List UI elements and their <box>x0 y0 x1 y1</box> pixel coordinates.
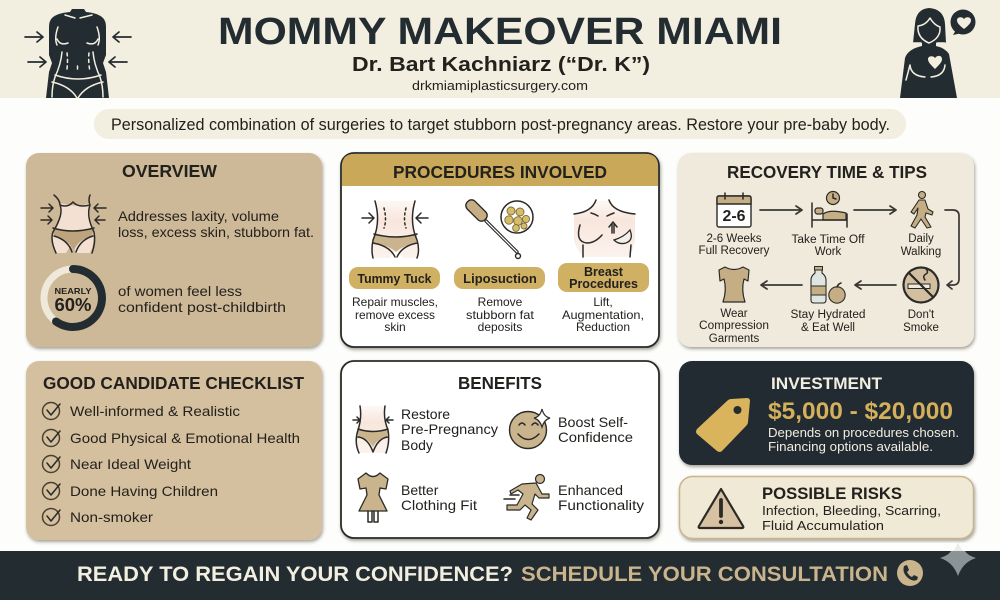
heading: benefits: BENEFITS <box>458 373 542 393</box>
procedure: tummy tuck <box>349 267 440 334</box>
header band <box>0 0 1000 98</box>
icon: waist <box>41 195 106 253</box>
risks text: Infection, Bleeding, Scarring, <box>762 503 941 518</box>
heading: risks: POSSIBLE RISKS <box>762 484 902 503</box>
procedure: tummy tuck: Tummy Tuck <box>358 271 432 286</box>
benefit: restore body: Body <box>401 437 433 453</box>
panel: overview: loss, excess skin, stubborn fat. <box>118 224 314 240</box>
check item 4: Done Having Children <box>70 483 218 499</box>
subtitle: doctor name: Dr. Bart Kachniarz (“Dr. K”) <box>352 54 650 76</box>
footer banner <box>0 541 1000 600</box>
step: time off: Take Time Off <box>792 234 865 246</box>
risks text: Fluid Accumulation <box>762 518 884 533</box>
step: hydrate and eat: Stay Hydrated <box>790 309 866 321</box>
benefit: clothing fit: Better <box>401 482 439 498</box>
step: time off <box>792 192 865 258</box>
check item 2: Good Physical & Emotional Health <box>70 430 300 446</box>
check item 1: Well-informed & Realistic <box>70 403 240 419</box>
panel: overview: confident post-childbirth <box>118 299 286 315</box>
check item 5 <box>42 508 153 526</box>
procedure: tummy tuck: remove excess <box>355 308 435 322</box>
arrow <box>760 206 802 214</box>
benefit: self-confidence: Boost Self- <box>558 414 628 430</box>
benefit: self-confidence <box>510 409 633 448</box>
icon: phone <box>897 560 923 586</box>
icon: body silhouette with arrows <box>25 9 131 98</box>
panel: recovery time and tips <box>678 153 974 347</box>
step: no smoking: Don't <box>908 309 935 321</box>
heading: recovery: RECOVERY TIME & TIPS <box>727 162 927 182</box>
step: compression garments: Garments <box>709 333 759 345</box>
procedure: breast procedures: Procedures <box>569 277 638 291</box>
website: drkmiamiplasticsurgery.com <box>412 78 588 93</box>
step: no smoking <box>903 268 939 334</box>
benefit: restore body <box>353 406 498 453</box>
benefit: clothing fit <box>358 473 477 522</box>
panel: possible risks <box>680 476 974 538</box>
title: MOMMY MAKEOVER MIAMI <box>218 11 782 53</box>
donut chart: nearly 60%: 60% <box>54 295 92 315</box>
procedure: liposuction <box>454 267 545 334</box>
benefit: functionality: Functionality <box>558 497 644 513</box>
arrow <box>855 281 896 289</box>
arrow: bracket down <box>945 210 959 289</box>
heading: procedures: PROCEDURES INVOLVED <box>393 162 607 182</box>
call to action: READY TO REGAIN YOUR CONFIDENCE? <box>77 563 513 586</box>
heading: overview: OVERVIEW <box>122 161 217 181</box>
benefit: clothing fit: Clothing Fit <box>401 497 477 513</box>
step: calendar <box>698 193 770 257</box>
step: calendar: 2-6 Weeks <box>706 233 762 245</box>
step: hydrate and eat <box>790 266 866 334</box>
procedure: tummy tuck: skin <box>384 320 406 334</box>
procedure: liposuction: stubborn fat <box>466 308 535 322</box>
procedure: liposuction: Liposuction <box>463 271 537 286</box>
tagline pill: Personalized combination of surgeries to target stubborn post-pregnancy areas. Restore your pre-baby body. <box>111 116 890 134</box>
icon: price tag <box>696 398 750 452</box>
investment note: Financing options available. <box>768 440 933 454</box>
investment note: Depends on procedures chosen. <box>768 426 959 440</box>
investment note <box>768 426 959 454</box>
risks text <box>762 503 941 533</box>
check item 3: Near Ideal Weight <box>70 456 191 472</box>
step: calendar: 2-6 <box>722 208 746 225</box>
icon: woman with heart <box>900 8 976 98</box>
donut chart: nearly 60% <box>44 269 102 327</box>
procedure: breast procedures: Lift, <box>593 295 613 309</box>
step: walking: Walking <box>901 246 941 258</box>
stat text: of women feel less <box>118 283 242 299</box>
heading: checklist: GOOD CANDIDATE CHECKLIST <box>43 373 304 393</box>
procedure: breast procedures: Breast <box>584 265 624 279</box>
arrow <box>761 281 802 289</box>
footer banner: SCHEDULE YOUR CONSULTATION <box>521 563 888 586</box>
benefit: functionality <box>504 474 644 520</box>
procedure: breast procedures: Reduction <box>576 320 630 334</box>
benefit: functionality: Enhanced <box>558 482 623 498</box>
icon: breast procedures <box>574 200 635 257</box>
icon: liposuction cannula <box>464 198 533 258</box>
step: compression garments: Wear <box>720 308 748 320</box>
benefit: restore body: Restore <box>401 406 450 422</box>
step: no smoking: Smoke <box>903 322 939 334</box>
panel: overview <box>26 153 322 347</box>
procedure: tummy tuck: Repair muscles, <box>352 295 438 309</box>
benefit: self-confidence: Confidence <box>558 429 633 445</box>
step: walking: Daily <box>908 233 934 245</box>
procedure: breast procedures: Augmentation, <box>562 308 644 322</box>
step: compression garments <box>699 267 769 345</box>
heading: investment: INVESTMENT <box>771 374 883 393</box>
tagline pill <box>94 109 906 139</box>
check item 5: Non-smoker <box>70 509 153 525</box>
arrow <box>854 206 896 214</box>
decorative star <box>940 541 976 576</box>
icon: warning triangle <box>699 489 743 528</box>
step: calendar: Full Recovery <box>698 245 770 257</box>
icon: tummy tuck <box>362 201 428 258</box>
step: time off: Work <box>815 246 842 258</box>
donut chart: nearly 60%: NEARLY <box>54 286 92 296</box>
step: compression garments: Compression <box>699 320 769 332</box>
step: walking <box>901 192 941 258</box>
panel: investment <box>679 361 974 465</box>
benefit: restore body: Pre-Pregnancy <box>401 421 498 437</box>
panel: procedures involved <box>341 153 659 347</box>
overview text: Addresses laxity, volume <box>118 208 279 224</box>
procedure: breast procedures <box>558 263 649 334</box>
procedure: liposuction: Remove <box>478 295 523 309</box>
panel: good candidate checklist <box>26 361 322 540</box>
price range: $5,000 - $20,000 <box>768 398 953 425</box>
panel: benefits <box>341 361 659 538</box>
step: hydrate and eat: & Eat Well <box>801 322 855 334</box>
procedure: liposuction: deposits <box>478 320 522 334</box>
